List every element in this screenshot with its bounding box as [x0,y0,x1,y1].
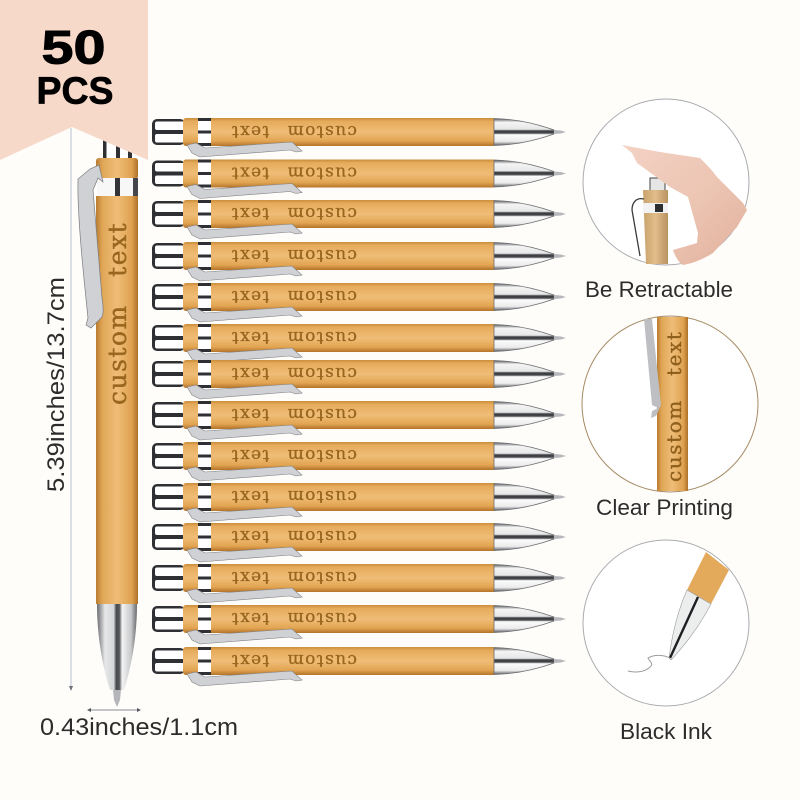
pen metal band [97,178,138,197]
pen row 2: custom text [230,162,357,182]
pen row 7 [152,360,566,399]
pen row 8: custom text [230,404,357,424]
pen row 5: custom text [230,286,357,306]
pen row 9 [152,442,566,481]
pen clip [78,165,103,328]
pen row 10 [152,483,566,522]
width dimension arrow [87,708,141,712]
pen row 9: custom text [230,445,357,465]
engraved text: custom text [103,222,132,405]
pen point [113,690,121,707]
pen row 13 [152,605,566,644]
large vertical pen [78,138,138,707]
pen row 1 [152,118,566,157]
badge: 50 PCS [0,0,148,160]
width label: 0.43inches/1.1cm [40,714,238,741]
pen row 12: custom text [230,567,357,587]
badge number: 50 [42,20,106,74]
caption: be retractable: Be Retractable [585,277,733,302]
pen row 1: custom text [230,121,357,141]
pen row 8 [152,401,566,440]
caption: clear printing: Clear Printing [596,495,733,520]
pen row 14: custom text [230,650,357,670]
pen row 11: custom text [230,526,357,546]
pen row 12 [152,564,566,603]
pen upper wood section [96,158,138,179]
icon: pen pressed by finger [632,178,668,264]
pen row 3: custom text [230,203,357,223]
pen row 5 [152,283,566,322]
icon: pen tip writing [669,552,729,660]
caption: black ink: Black Ink [620,719,713,744]
pen row 3 [152,200,566,239]
pen row 13: custom text [230,608,357,628]
panel: be retractable [583,99,749,265]
badge unit: PCS [36,70,114,112]
height label: 5.39inches/13.7cm [43,277,70,492]
pen row 2 [152,160,566,198]
pen row 4 [152,242,566,281]
pen row 14 [152,647,566,686]
icon: hand [622,145,747,265]
pen row 10: custom text [230,486,357,506]
icon: clip close-up [644,319,661,418]
engraved text close-up: custom text [662,330,686,482]
panel: black ink [583,540,749,706]
panel: clear printing [582,316,758,492]
pen row 6 [152,324,566,363]
pen row 4: custom text [230,245,357,265]
pen metal tip [97,604,137,690]
pen row 11 [152,523,566,562]
pen row 6: custom text [230,327,357,347]
icon: ink scribble [628,655,670,672]
pen barrel [96,196,138,604]
pen row 7: custom text [230,363,357,383]
dimension arrow: height [69,128,73,691]
pen push cap [103,138,133,160]
icon: pen barrel close-up [657,317,688,491]
